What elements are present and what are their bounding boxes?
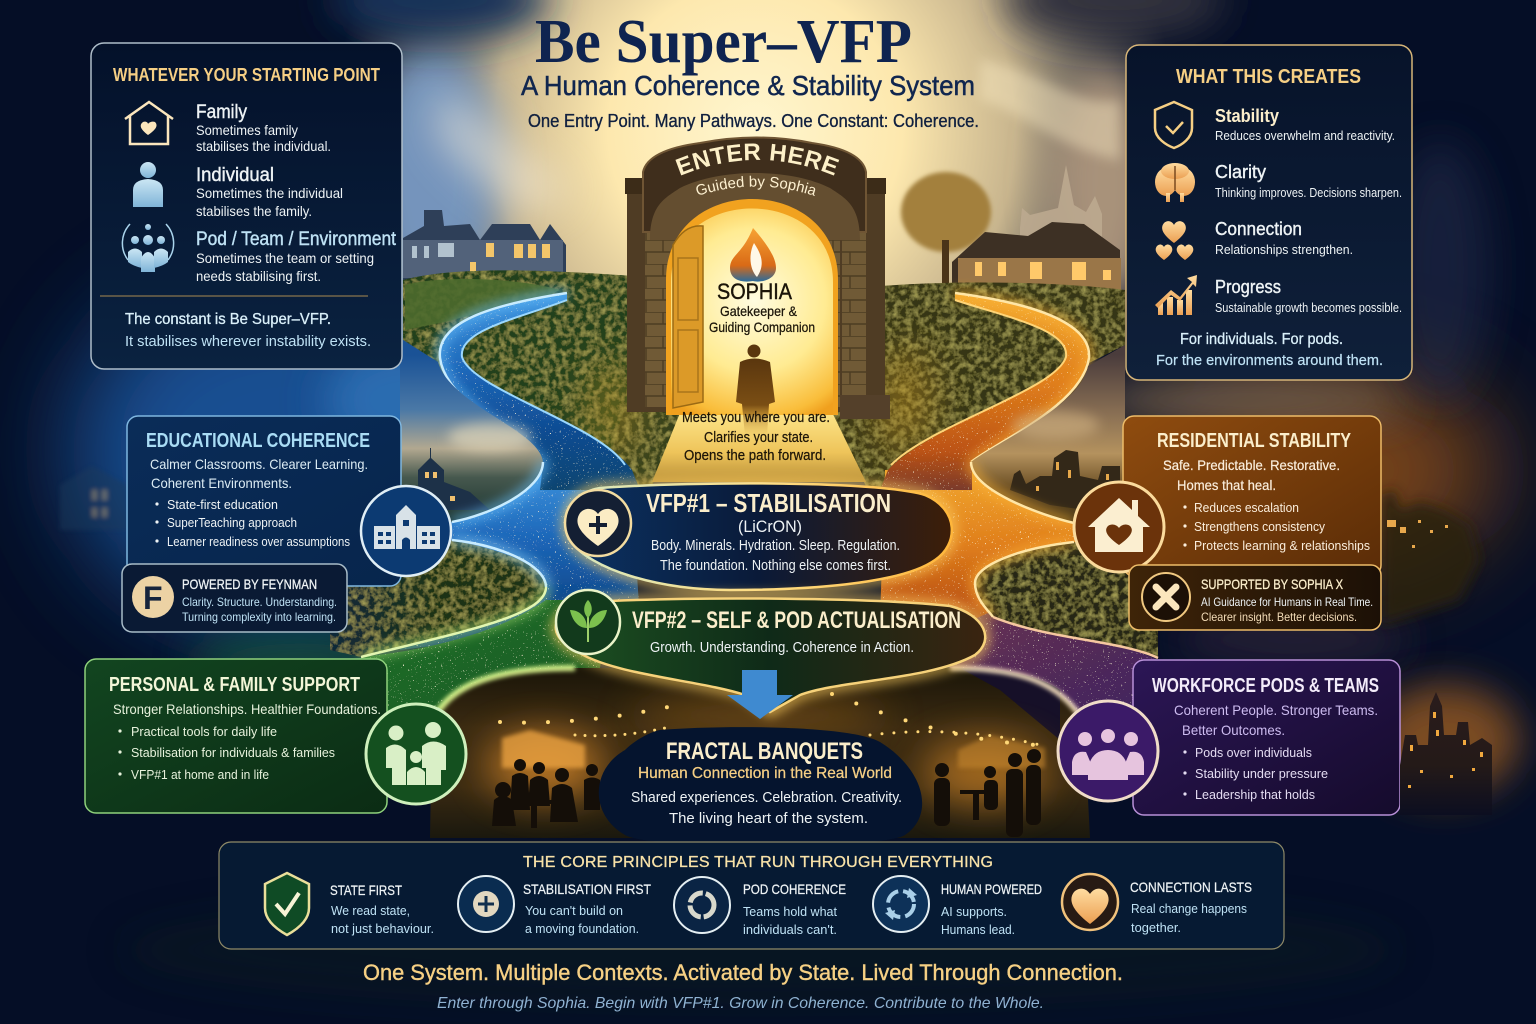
state first: [330, 882, 434, 936]
individual text: stabilises the family.: [196, 203, 312, 219]
gate: arch lettering: ENTER HERE: [676, 144, 840, 176]
state first: STATE FIRST: [330, 882, 402, 898]
icon: school badge: [361, 486, 451, 576]
panel: personal and family support: [85, 659, 387, 813]
sophia x text: Clearer insight. Better decisions.: [1201, 610, 1357, 624]
text: sophia label: Guiding Companion: [709, 319, 815, 335]
icon: pod ring: [674, 877, 730, 933]
family text: Family: [196, 102, 247, 123]
scene: house, tree and skyline: [901, 165, 1121, 292]
heading: VFP#1 – STABILISATION: [646, 488, 891, 518]
pod coherence: POD COHERENCE: [743, 881, 846, 897]
bullet list: SuperTeaching approach: [167, 515, 297, 530]
text: sophia label: SOPHIA: [717, 279, 792, 304]
text: sophia promises: Meets you where you are.: [682, 409, 830, 426]
feynman text: Turning complexity into learning.: [182, 610, 336, 624]
icon: cycle arrows: [873, 876, 929, 932]
state first: not just behaviour.: [331, 921, 434, 936]
icon: sophia flame: [730, 228, 776, 282]
closing statement: For individuals. For pods.: [1180, 331, 1343, 348]
door: [673, 226, 703, 408]
description: Growth. Understanding. Coherence in Action.: [650, 639, 914, 656]
pod coherence: individuals can't.: [743, 922, 837, 937]
bullet list: Stability under pressure: [1195, 766, 1328, 781]
human powered: [941, 881, 1042, 937]
panel: residential stability: [1123, 416, 1381, 576]
gate: arch lettering: [676, 144, 840, 196]
heading: PERSONAL & FAMILY SUPPORT: [109, 674, 360, 696]
text: sophia label: [709, 279, 815, 335]
connection text: Relationships strengthen.: [1215, 242, 1353, 257]
path: orange ribbon: [880, 293, 1089, 490]
icon: individual: [133, 162, 163, 207]
bullet list: [155, 497, 350, 549]
scene: left forest cutout: [330, 535, 546, 657]
pod coherence: Teams hold what: [743, 904, 837, 919]
icon: x badge: [1142, 573, 1190, 621]
scene: right city skyline: [1400, 692, 1492, 815]
scene: educational cutout: [400, 338, 543, 530]
pod text: Pod / Team / Environment: [196, 229, 397, 250]
panel: fractal banquets: [599, 727, 922, 846]
scene: garden foliage: [403, 270, 1125, 490]
bullet list: Protects learning & relationships: [1194, 538, 1370, 553]
description: The living heart of the system.: [669, 810, 868, 827]
subheading: (LiCrON): [738, 517, 802, 536]
closing statement: [1156, 331, 1383, 369]
walkway: [652, 408, 866, 482]
bullet list: Practical tools for daily life: [131, 724, 277, 739]
sophia x text: [1201, 576, 1373, 624]
closing sub line: Enter through Sophia. Begin with VFP#1. Grow in Coherence. Contribute to the Whole.: [437, 995, 1044, 1012]
icon: feynman badge: [132, 576, 174, 618]
constant statement: [125, 311, 371, 350]
path: blue ribbon: [440, 293, 640, 490]
panel: educational coherence: [127, 416, 401, 586]
bullet list: State-first education: [167, 497, 278, 512]
tagline: One Entry Point. Many Pathways. One Constant: Coherence.: [528, 111, 979, 131]
pod text: Sometimes the team or setting: [196, 250, 374, 266]
scene: faint school behind panel: [60, 466, 127, 530]
description: [651, 537, 900, 574]
panel: powered by feynman: [122, 564, 347, 632]
connection lasts: together.: [1131, 920, 1181, 935]
description: [1163, 457, 1340, 493]
bullet list: [1183, 500, 1370, 553]
icon: brain: [1155, 163, 1195, 202]
clarity text: [1215, 162, 1402, 200]
family text: stabilises the individual.: [196, 138, 331, 154]
family text: Sometimes family: [196, 122, 298, 138]
text: sophia promises: [682, 409, 830, 464]
feynman text: [182, 576, 337, 624]
sophia x text: SUPPORTED BY SOPHIA X: [1201, 576, 1344, 592]
state first: We read state,: [331, 903, 410, 918]
scene: lawn and flower glow: [405, 279, 935, 460]
description: [631, 789, 902, 827]
description: [1174, 702, 1378, 738]
heading: WORKFORCE PODS & TEAMS: [1152, 675, 1379, 697]
icon: heart plus: [565, 490, 631, 556]
description: Body. Minerals. Hydration. Sleep. Regulation.: [651, 537, 900, 554]
heading: VFP#2 – SELF & POD ACTUALISATION: [632, 607, 961, 634]
constant statement: It stabilises wherever instability exists.: [125, 333, 371, 350]
heading: THE CORE PRINCIPLES THAT RUN THROUGH EVERYTHING: [523, 854, 993, 871]
scene: right forest cutout: [975, 542, 1158, 658]
icon: hearts: [1156, 221, 1193, 260]
scene: sky: [330, 0, 1225, 550]
stability text: Reduces overwhelm and reactivity.: [1215, 128, 1395, 143]
progress text: Progress: [1215, 277, 1281, 297]
gate: enter here archway: [625, 138, 890, 482]
icon: progress chart: [1155, 275, 1197, 315]
scene: residential cutout: [971, 345, 1125, 525]
panel: vfp 1 stabilisation: [565, 483, 952, 590]
feynman text: Clarity. Structure. Understanding.: [182, 595, 337, 609]
bullet list: Reduces escalation: [1194, 500, 1299, 515]
connection text: [1215, 219, 1353, 257]
title: [521, 8, 979, 131]
connection text: Connection: [1215, 219, 1302, 239]
stabilisation first: [523, 881, 651, 936]
description: Better Outcomes.: [1182, 722, 1285, 738]
scene: fractal banquets garden party: [430, 668, 1090, 838]
arrow: down to fractal banquets: [727, 670, 793, 719]
human powered: Humans lead.: [941, 922, 1015, 937]
stability text: Stability: [1215, 106, 1279, 126]
bullet list: Learner readiness over assumptions: [167, 534, 350, 549]
path: colour fields: [361, 465, 1158, 725]
bullet list: VFP#1 at home and in life: [131, 767, 269, 782]
family text: [196, 102, 331, 154]
icon: plant: [556, 590, 620, 654]
icon: heart: [1062, 874, 1118, 930]
icon: family badge: [366, 704, 466, 804]
icon: feynman badge: F: [143, 580, 163, 616]
individual text: [196, 165, 343, 219]
progress text: Sustainable growth becomes possible.: [1215, 300, 1402, 315]
heading: FRACTAL BANQUETS: [666, 738, 863, 765]
bullet list: [1183, 745, 1328, 802]
text: sophia label: Gatekeeper &: [720, 303, 798, 319]
pod text: [196, 229, 397, 284]
constant statement: The constant is Be Super–VFP.: [125, 311, 331, 328]
arch band: [643, 138, 866, 232]
icon: team badge: [1058, 701, 1158, 801]
icon: pod: [122, 224, 174, 272]
icon: home badge: [1074, 482, 1164, 572]
gate: arch lettering: Guided by Sophia: [696, 176, 816, 196]
stabilisation first: STABILISATION FIRST: [523, 881, 651, 897]
subtitle: A Human Coherence & Stability System: [521, 70, 975, 101]
connection lasts: [1130, 879, 1252, 935]
individual text: Sometimes the individual: [196, 185, 343, 201]
subheading: Human Connection in the Real World: [638, 765, 892, 782]
feynman text: POWERED BY FEYNMAN: [182, 576, 317, 592]
panel: supported by sophia x: [1129, 565, 1381, 630]
panel: workforce pods and teams: [1133, 660, 1400, 815]
bullet list: Leadership that holds: [1195, 787, 1315, 802]
clarity text: Clarity: [1215, 162, 1266, 182]
heading: WHAT THIS CREATES: [1176, 66, 1361, 88]
icon: plus circle: [458, 876, 514, 932]
human powered: AI supports.: [941, 904, 1007, 919]
sophia x text: AI Guidance for Humans in Real Time.: [1201, 595, 1373, 609]
pod text: needs stabilising first.: [196, 268, 321, 284]
description: Homes that heal.: [1177, 477, 1276, 493]
human powered: HUMAN POWERED: [941, 881, 1042, 897]
connection lasts: CONNECTION LASTS: [1130, 879, 1252, 895]
silhouette: [736, 344, 775, 436]
icon: family house: [125, 102, 173, 144]
stone pillars: [627, 180, 885, 412]
closing statement: For the environments around them.: [1156, 352, 1383, 369]
closing line: One System. Multiple Contexts. Activated by State. Lived Through Connection.: [363, 960, 1123, 985]
individual text: Individual: [196, 165, 274, 186]
bullet list: Stabilisation for individuals & families: [131, 745, 335, 760]
title: Be Super–VFP: [535, 8, 912, 76]
heading: WHATEVER YOUR STARTING POINT: [113, 65, 380, 85]
heading: EDUCATIONAL COHERENCE: [146, 430, 370, 452]
scene: school building: [403, 210, 566, 280]
bullet list: Pods over individuals: [1195, 745, 1312, 760]
description: Shared experiences. Celebration. Creativity.: [631, 789, 902, 806]
icon: shield: [1155, 102, 1192, 148]
panel: core principles: [219, 842, 1284, 949]
description: The foundation. Nothing else comes first.: [660, 557, 891, 574]
description: [150, 456, 368, 491]
text: sophia promises: Clarifies your state.: [704, 429, 813, 446]
pod coherence: [743, 881, 846, 937]
connection lasts: Real change happens: [1131, 901, 1247, 916]
panel: what this creates: [1126, 45, 1412, 380]
scene: right side town lights: [1381, 490, 1480, 625]
progress text: [1215, 277, 1402, 315]
panel: whatever your starting point: [91, 43, 402, 369]
description: Coherent Environments.: [151, 475, 292, 491]
panel: vfp 2 self and pod actualisation: [556, 590, 985, 712]
text: sophia promises: Opens the path forward.: [684, 447, 826, 464]
clarity text: Thinking improves. Decisions sharpen.: [1215, 185, 1402, 200]
bullet list: Strengthens consistency: [1194, 519, 1325, 534]
opening: [666, 199, 838, 415]
description: Calmer Classrooms. Clearer Learning.: [150, 456, 368, 472]
bullet list: [118, 724, 335, 782]
description: Stronger Relationships. Healthier Foundations.: [113, 701, 381, 717]
heading: RESIDENTIAL STABILITY: [1157, 430, 1352, 452]
description: Coherent People. Stronger Teams.: [1174, 702, 1378, 718]
stabilisation first: You can't build on: [525, 903, 623, 918]
stabilisation first: a moving foundation.: [525, 921, 639, 936]
icon: green shield: [265, 873, 309, 935]
stability text: [1215, 106, 1395, 143]
description: Safe. Predictable. Restorative.: [1163, 457, 1340, 473]
